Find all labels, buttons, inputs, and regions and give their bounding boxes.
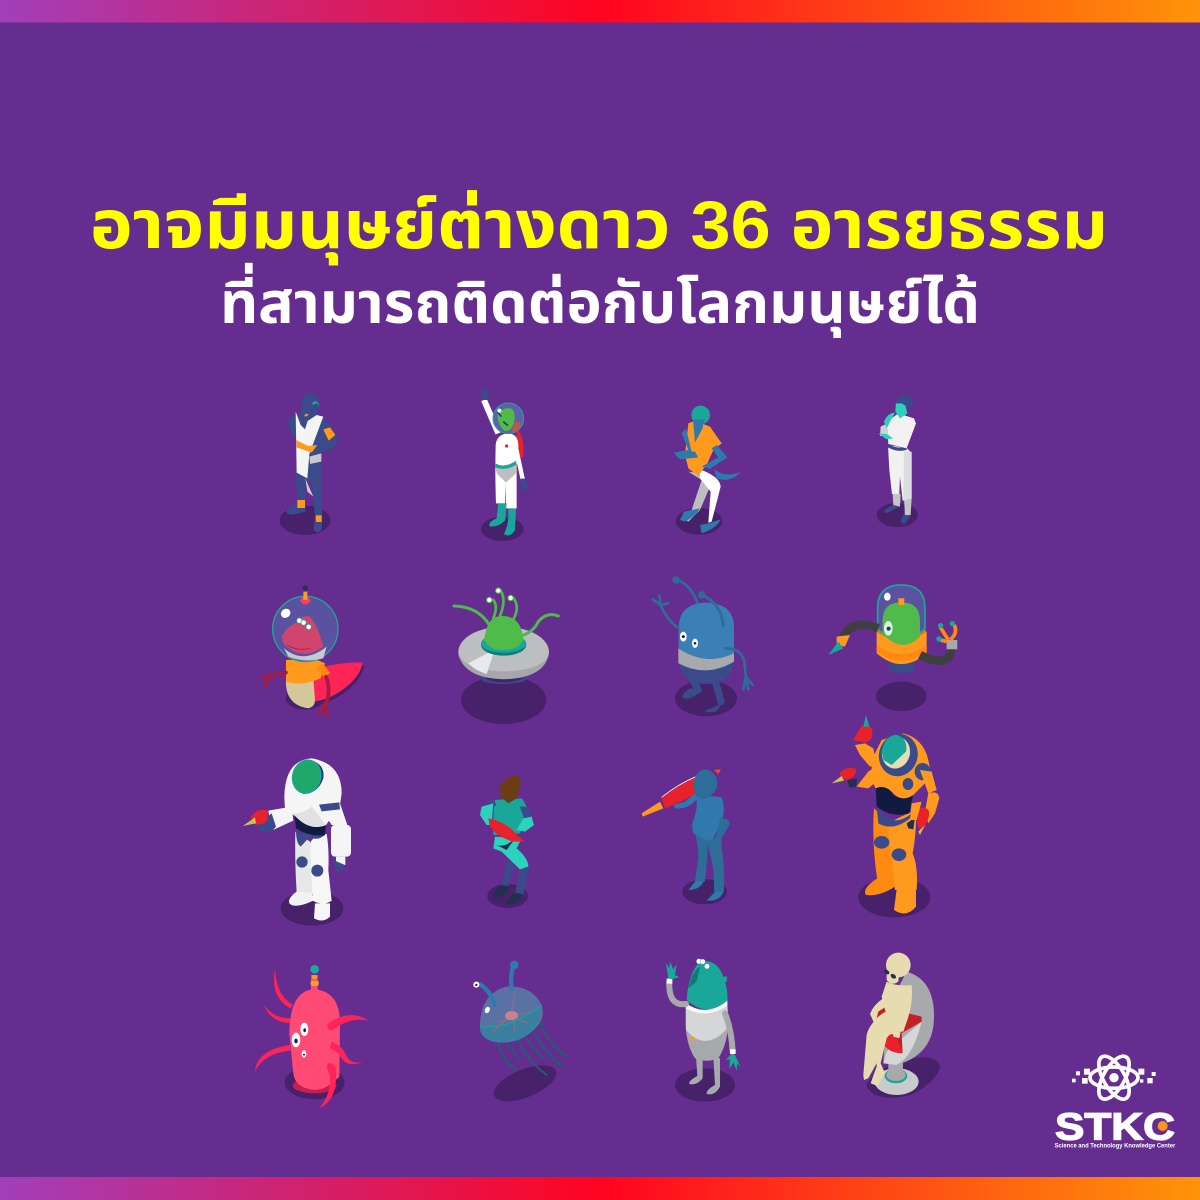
- character: translucent jellyfish alien: [473, 961, 567, 1109]
- logo tagline: Science and Technology Knowledge Center: [1055, 1143, 1176, 1150]
- character: white armoured astronaut with ray gun: [243, 757, 351, 926]
- bottom gradient bar: [0, 1177, 1200, 1200]
- logo atom icon: [1072, 1052, 1156, 1104]
- character: green alien in orange robot pod: [828, 585, 957, 711]
- logo wordmark: STKC: [1055, 1106, 1175, 1148]
- character: pink alien in bubble helmet on rocket: [263, 585, 364, 715]
- character: white suited alien with teal skin: [877, 395, 918, 527]
- top gradient bar: [0, 0, 1200, 22]
- title line 1: อาจมีมนุษย์ต่างดาว 36 อารยธรรม: [90, 187, 1108, 266]
- character: blue alien shouldering rocket launcher: [642, 769, 730, 904]
- title line 2: ที่สามารถติดต่อกับโลกมนุษย์ได้: [220, 262, 980, 338]
- character: round blue alien with antennae: [653, 576, 753, 716]
- title: [90, 187, 1108, 338]
- character: pink tentacled alien: [255, 965, 368, 1108]
- character: teal alien with grey body waving: [666, 959, 741, 1102]
- logo: STKC: [1055, 1052, 1176, 1150]
- character: blue alien in orange top: [673, 406, 741, 535]
- character: blue warrior in white tabard: [280, 393, 337, 535]
- character: green alien in grey saucer: [454, 588, 558, 724]
- character: orange armoured astronaut with ray guns: [832, 715, 939, 917]
- character: teal alien with brown head holding ray gun: [480, 776, 534, 908]
- logo orange dot: [1158, 1121, 1168, 1131]
- character: astronaut with green head: [481, 385, 528, 541]
- character: pale alien in egg chair: [863, 953, 940, 1098]
